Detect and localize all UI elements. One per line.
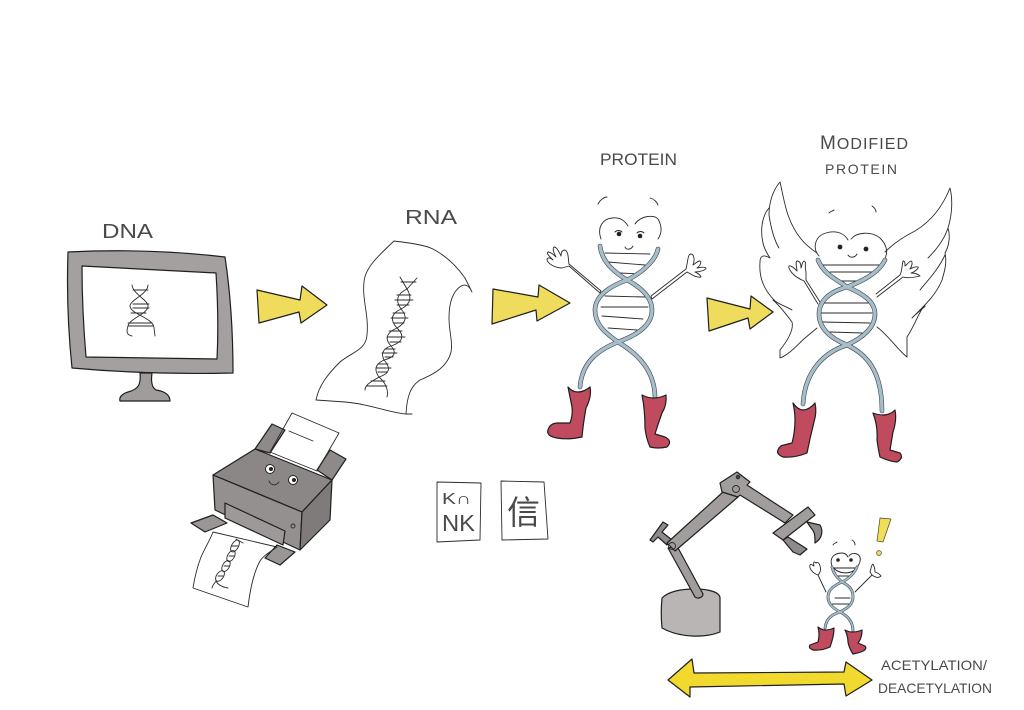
symbol row one: K∩ [442,491,471,508]
right hand and arm [651,254,706,299]
monitor frame [68,251,233,373]
arrow: protein to modified protein [707,296,773,331]
character: protein [547,197,706,448]
helix rungs [601,253,650,330]
heading: MODIFIED PROTEIN [820,133,908,177]
exclamation dot [877,551,881,555]
printer top [213,449,332,512]
printer eyes and smile [266,464,298,485]
printer side [300,480,332,550]
eyes [838,245,868,251]
printed helix [212,539,243,588]
exclamation bar [877,518,891,542]
head and eyebrows [815,206,887,260]
clamp [773,507,815,540]
heading: RNA: RNA [405,207,458,229]
label: acetylation and deacetylation [878,657,992,696]
icon: robot arm [650,472,822,636]
helix body [803,260,885,411]
left boot [778,403,816,457]
left hand and arm [547,247,601,293]
front paper tray [191,515,295,565]
code card: character [501,481,548,540]
icon: exclamation mark [877,518,891,555]
heading line two: PROTEIN [825,161,897,177]
printer front [213,475,302,550]
eyes and mouth [834,558,856,573]
upper claw [807,522,822,543]
monitor stand [120,373,170,401]
arrow: DNA to RNA [257,286,327,323]
heading: PROTEIN: PROTEIN [600,150,677,169]
left boot [809,627,834,650]
printed paper [193,532,277,607]
RNA helix [365,277,417,397]
head [831,540,860,567]
right wing [877,188,952,357]
icon: printer with face [191,413,346,607]
helix body [580,246,658,396]
right hand and arm [876,261,920,297]
left hand and arm [789,261,820,304]
icon: computer monitor with DNA [68,251,233,401]
character: 信 [507,494,540,531]
paper tail [406,413,412,415]
heading: DNA: DNA [102,221,154,243]
joints [668,475,740,550]
head and eyebrows [598,197,661,249]
DNA on screen [127,285,155,336]
paper guide line [289,431,313,441]
character: modified protein with wings [760,182,952,462]
heading line one: MODIFIED [820,133,908,154]
right boot [642,395,670,448]
label line two: DEACETYLATION [878,680,992,696]
helix rungs [820,265,884,333]
card outline [437,482,481,542]
paper sheet [316,241,472,414]
eyes [617,232,642,238]
helix body [825,567,857,631]
handle [650,522,672,545]
lower arm [668,546,703,598]
double arrow: acetylation and deacetylation [668,659,872,697]
rear paper rests [255,424,346,480]
left wing [760,182,817,358]
joint and forearm [720,472,793,523]
arms and hands [810,562,881,592]
code card: coded symbols [437,482,481,542]
upper arm [667,492,738,551]
card outline [501,481,548,540]
robot base [661,589,720,636]
lower claw [783,537,807,555]
left boot [548,387,590,439]
right boot [845,630,866,654]
symbol row two: NK [442,510,476,536]
paper slot [225,503,285,545]
icon: RNA paper strand [316,241,472,414]
character: small protein [809,540,881,654]
paper feeding in [270,413,339,471]
button [291,524,295,528]
arrow: RNA to protein [492,285,570,324]
right boot [873,410,901,462]
label line one: ACETYLATION/ [881,657,987,673]
